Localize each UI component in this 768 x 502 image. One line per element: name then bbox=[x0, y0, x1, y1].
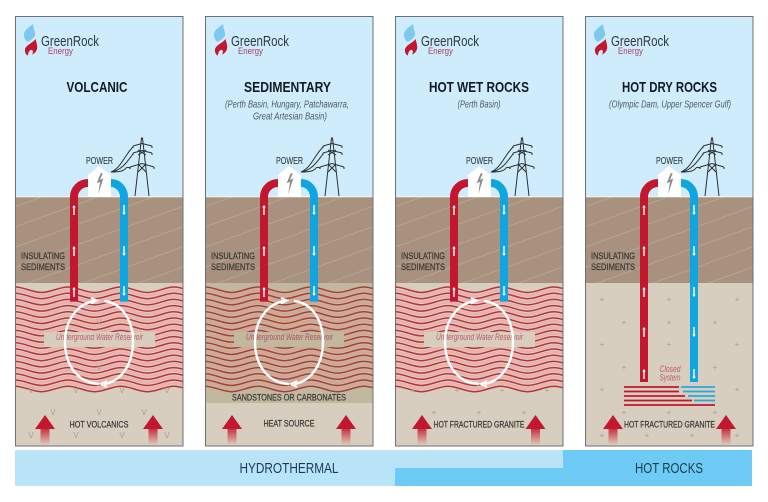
logo bbox=[214, 24, 289, 57]
insulating sediments label: INSULATING bbox=[211, 251, 255, 261]
rock symbols: V bbox=[50, 408, 56, 417]
rock symbols bbox=[410, 386, 550, 417]
closed system label bbox=[660, 364, 681, 382]
rock symbols: + bbox=[667, 295, 672, 304]
rock symbols: + bbox=[667, 318, 672, 327]
heat arrows bbox=[603, 415, 736, 445]
pipes bbox=[70, 183, 128, 302]
sandstones label: SANDSTONES OR CARBONATES bbox=[232, 392, 346, 402]
sandstone layer bbox=[205, 283, 373, 403]
category band: hot rocks bbox=[395, 450, 752, 486]
rock symbols: + bbox=[735, 295, 740, 304]
rock symbols: + bbox=[545, 386, 550, 395]
title: HOT WET ROCKS bbox=[429, 79, 529, 96]
insulating sediments label: INSULATING bbox=[591, 251, 635, 261]
rock symbols: V bbox=[73, 386, 79, 395]
rock symbols: + bbox=[667, 340, 672, 349]
rock symbols bbox=[600, 295, 740, 440]
insulating sediments label bbox=[401, 251, 445, 272]
insulating sediments label bbox=[211, 251, 255, 272]
power label: POWER bbox=[656, 156, 683, 167]
deep pipes bbox=[640, 183, 698, 382]
geothermal loop bbox=[445, 298, 513, 387]
panel: sedimentary bbox=[205, 16, 390, 446]
reservoir label: Underground Water Reservoir bbox=[246, 332, 334, 342]
rock symbols: + bbox=[500, 386, 505, 395]
power label: POWER bbox=[276, 156, 303, 167]
rock symbols: V bbox=[164, 386, 170, 395]
rock symbols: + bbox=[410, 386, 415, 395]
reservoir label: Underground Water Reservoir bbox=[436, 332, 524, 342]
rock symbols: V bbox=[119, 431, 125, 440]
reservoir label bbox=[234, 332, 344, 347]
panel: hot dry rocks bbox=[585, 16, 753, 446]
power plant and pylon bbox=[468, 138, 534, 197]
rock symbols: V bbox=[96, 408, 102, 417]
reservoir label bbox=[424, 332, 535, 347]
insulating sediments label: INSULATING bbox=[21, 251, 65, 261]
rock symbols: V bbox=[96, 318, 102, 327]
water reservoir waves bbox=[15, 287, 200, 392]
rock symbols: V bbox=[73, 431, 79, 440]
rock symbols: + bbox=[690, 431, 695, 440]
rock symbols: + bbox=[713, 318, 718, 327]
insulating sediments label: SEDIMENTS bbox=[591, 262, 635, 272]
insulating sediments label: SEDIMENTS bbox=[21, 262, 65, 272]
title: SEDIMENTARY bbox=[244, 79, 331, 96]
rock symbols: V bbox=[164, 431, 170, 440]
rock symbols: V bbox=[141, 408, 147, 417]
closed system fractures bbox=[624, 387, 715, 405]
locations: Great Artesian Basin) bbox=[253, 112, 327, 122]
hot rocks label: HOT ROCKS bbox=[635, 460, 703, 477]
title: HOT DRY ROCKS bbox=[622, 79, 717, 96]
rock symbols bbox=[28, 318, 170, 440]
power plant and pylon bbox=[658, 138, 724, 197]
rock symbols: + bbox=[645, 431, 650, 440]
insulating sediments label bbox=[591, 251, 635, 272]
logo bbox=[594, 24, 669, 57]
rock symbols: + bbox=[600, 385, 605, 394]
rock symbols: + bbox=[713, 408, 718, 417]
logo bbox=[404, 24, 479, 57]
rock symbols: + bbox=[455, 386, 460, 395]
heat arrows bbox=[412, 415, 546, 445]
reservoir label bbox=[44, 332, 155, 347]
locations bbox=[225, 100, 349, 122]
rock symbols: + bbox=[735, 431, 740, 440]
rock symbols: V bbox=[96, 363, 102, 372]
rock symbols: + bbox=[713, 363, 718, 372]
rock symbols: V bbox=[28, 431, 34, 440]
heat label: HOT VOLCANICS bbox=[70, 420, 128, 430]
panel: hot wet rocks bbox=[395, 16, 580, 446]
water reservoir waves bbox=[395, 287, 580, 392]
panel: volcanic bbox=[15, 16, 200, 446]
rock symbols: + bbox=[622, 408, 627, 417]
insulating sediments label: SEDIMENTS bbox=[211, 262, 255, 272]
title: VOLCANIC bbox=[66, 79, 128, 96]
power plant and pylon bbox=[278, 138, 344, 197]
category band: hydrothermal bbox=[15, 450, 563, 486]
closed system label: Closed bbox=[660, 364, 681, 374]
panel border bbox=[396, 16, 563, 446]
power label: POWER bbox=[466, 156, 493, 167]
heat arrows bbox=[222, 415, 356, 445]
rock symbols: + bbox=[477, 408, 482, 417]
rock symbols: V bbox=[28, 386, 34, 395]
pipes bbox=[260, 183, 318, 302]
rock symbols: + bbox=[735, 340, 740, 349]
hydrothermal label: HYDROTHERMAL bbox=[240, 460, 338, 477]
locations: (Perth Basin) bbox=[458, 100, 500, 110]
locations: (Olympic Dam, Upper Spencer Gulf) bbox=[609, 100, 731, 110]
heat label: HOT FRACTURED GRANITE bbox=[624, 420, 715, 430]
rock symbols: + bbox=[667, 408, 672, 417]
geothermal loop bbox=[65, 298, 133, 387]
reservoir label: Underground Water Reservoir bbox=[56, 332, 144, 342]
rock symbols: + bbox=[522, 408, 527, 417]
heat label: HOT FRACTURED GRANITE bbox=[434, 420, 524, 430]
water reservoir waves bbox=[205, 287, 390, 392]
insulating sediments label: SEDIMENTS bbox=[401, 262, 445, 272]
insulating sediments label: INSULATING bbox=[401, 251, 445, 261]
heat label: HEAT SOURCE bbox=[264, 418, 314, 428]
rock symbols: + bbox=[622, 318, 627, 327]
rock symbols: + bbox=[735, 385, 740, 394]
panel border bbox=[16, 16, 183, 446]
rock symbols: + bbox=[600, 340, 605, 349]
insulating sediments label bbox=[21, 251, 65, 272]
power plant and pylon bbox=[88, 138, 154, 197]
rock symbols: + bbox=[600, 431, 605, 440]
heat arrows bbox=[35, 415, 163, 445]
power label: POWER bbox=[86, 156, 113, 167]
rock symbols: V bbox=[119, 386, 125, 395]
closed system label: System bbox=[660, 372, 681, 382]
panel border bbox=[586, 16, 753, 446]
rock symbols: + bbox=[622, 363, 627, 372]
pipes bbox=[450, 183, 508, 302]
rock symbols: + bbox=[600, 295, 605, 304]
rock symbols: + bbox=[432, 408, 437, 417]
panel border bbox=[206, 16, 373, 446]
logo bbox=[24, 24, 99, 57]
locations: (Perth Basin, Hungary, Patchawarra, bbox=[225, 100, 349, 110]
geothermal loop bbox=[255, 298, 323, 387]
